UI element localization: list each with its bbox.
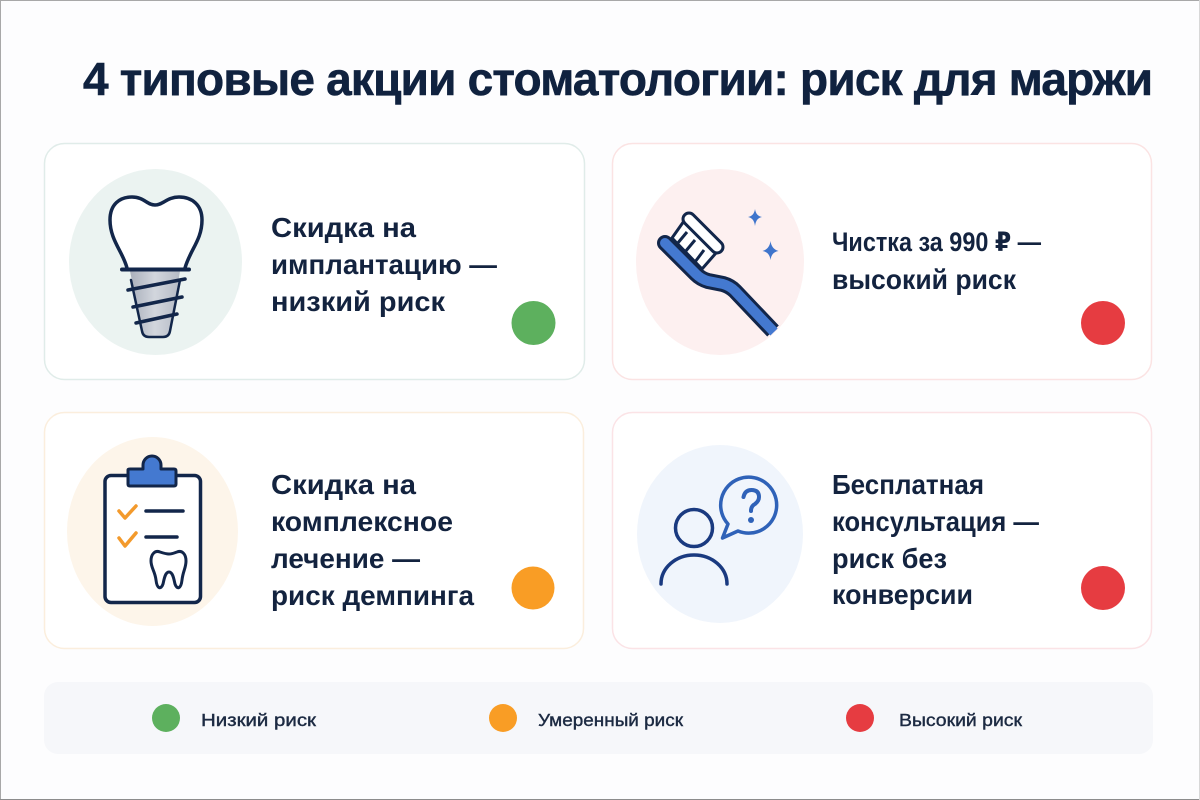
panel: implant discount, low risk: низкий риск (271, 286, 446, 317)
legend item: moderate risk: Умеренный риск (538, 710, 683, 730)
panel: complex treatment discount, dumping risk (44, 412, 584, 648)
legend item: low risk (152, 704, 316, 732)
legend item: low risk: Низкий риск (201, 710, 316, 730)
risk dot: green (512, 301, 556, 345)
icon: clipboard with tooth (105, 456, 200, 602)
panel: cleaning for 990, high risk: высокий риск (832, 264, 1017, 295)
heading: complex treatment card: Скидка на (271, 469, 416, 500)
panel: free consultation, no conversion risk: конверсии (832, 579, 973, 610)
icon: person with question bubble (661, 477, 777, 584)
risk dot: orange (512, 566, 554, 610)
legend item: moderate risk (489, 704, 683, 732)
panel: free consultation, no conversion risk: риск без (832, 543, 947, 574)
panel: implant discount, low risk: имплантацию — (271, 249, 497, 280)
heading: implant card: Скидка на (271, 212, 416, 243)
panel: free consultation, no conversion risk (612, 412, 1152, 648)
heading: cleaning card: Чистка за 990 ₽ — (832, 227, 1041, 257)
legend item: high risk (846, 704, 1022, 732)
panel: cleaning for 990, high risk (612, 144, 1152, 380)
panel: complex treatment discount, dumping risk: лечение — (271, 543, 420, 574)
icon: toothbrush with sparkles (657, 209, 778, 332)
legend item: high risk: Высокий риск (899, 710, 1022, 730)
panel: complex treatment discount, dumping risk: риск демпинга (271, 580, 474, 611)
risk dot: red (1081, 566, 1125, 610)
legend (44, 682, 1153, 754)
heading: consultation card: Бесплатная (832, 469, 984, 500)
risk dot: red (1081, 301, 1125, 345)
icon: dental implant (110, 197, 202, 337)
panel: implant discount, low risk (44, 144, 584, 380)
title: 4 типовые акции стоматологии: риск для маржи (83, 53, 1153, 105)
panel: complex treatment discount, dumping risk: комплексное (271, 506, 453, 537)
panel: free consultation, no conversion risk: консультация — (832, 506, 1039, 537)
